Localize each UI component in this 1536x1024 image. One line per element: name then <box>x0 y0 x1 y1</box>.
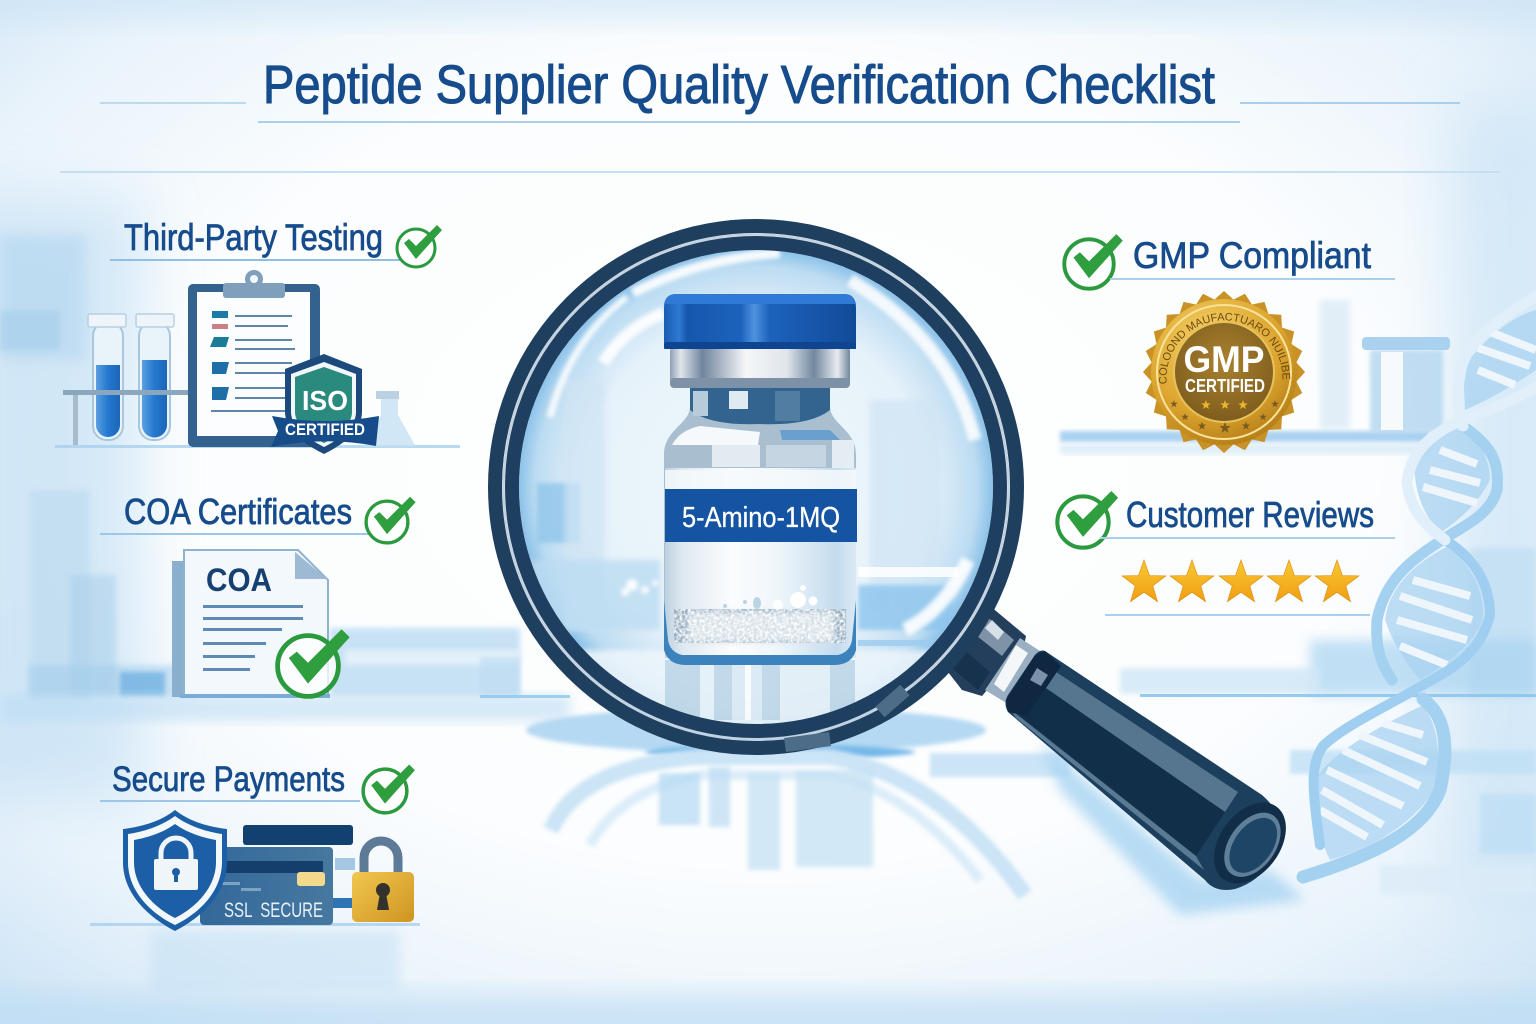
panel: COA certificates <box>100 491 416 698</box>
silver neck <box>985 638 1040 704</box>
vial label <box>665 468 856 658</box>
icon: test tubes in rack <box>63 314 196 445</box>
icon: green check <box>366 497 416 543</box>
heading underline <box>100 533 370 535</box>
badge: ISO certified <box>271 354 379 454</box>
end cap <box>1199 789 1301 897</box>
floor reflection of the magnifier <box>551 757 1025 895</box>
handle connector to rim <box>948 606 1026 696</box>
icon: large green check <box>278 629 350 696</box>
vial reflection <box>665 660 855 720</box>
title: Peptide Supplier Quality Verification Checklist <box>263 55 1215 115</box>
vial neck shading <box>690 388 830 424</box>
icon: flask <box>363 391 416 447</box>
icon: green check <box>363 765 415 813</box>
icon: credit card: SSL SECURE <box>224 899 323 922</box>
vial glass body <box>664 388 856 657</box>
blue cap <box>664 294 856 349</box>
icon: COA document: COA <box>206 562 272 598</box>
rating: five stars <box>1122 560 1359 602</box>
panel: secure payments <box>90 760 420 931</box>
badge: ISO certified: ISO <box>302 385 348 416</box>
heading: COA certificates: COA Certificates <box>124 491 352 532</box>
icon: magnifying glass handle <box>948 606 1301 897</box>
heading underline <box>110 259 400 261</box>
icon: credit card <box>200 825 360 925</box>
heading underline <box>1100 537 1395 539</box>
badge: GMP certified seal: GMP <box>1184 339 1264 380</box>
heading: GMP compliant: GMP Compliant <box>1133 235 1372 276</box>
shelf line <box>90 923 420 926</box>
badge: GMP certified seal: CERTIFIED <box>1185 376 1265 396</box>
badge: ISO certified: CERTIFIED <box>285 420 365 439</box>
heading underline <box>1110 278 1395 280</box>
grip ferrule <box>1006 651 1061 716</box>
label band with name: 5-Amino-1MQ <box>682 502 840 534</box>
rim highlight patches <box>785 690 905 745</box>
vial base <box>664 600 856 665</box>
grip <box>1005 650 1282 890</box>
lens interior <box>519 250 1000 740</box>
icon: COA document <box>172 550 330 698</box>
icon: green check <box>397 225 442 267</box>
magnifying glass rim <box>495 226 1017 748</box>
panel: GMP compliant <box>1062 234 1395 453</box>
badge: GMP certified seal: COLOOND MAUFACTUARO NUILIBE <box>1158 312 1290 384</box>
panel: third-party testing <box>55 217 460 454</box>
badge: GMP certified seal <box>1143 291 1305 453</box>
icon: green check <box>1064 234 1123 289</box>
rating underline <box>1105 614 1370 616</box>
vial <box>664 294 857 665</box>
decorative DNA helix <box>1303 296 1536 877</box>
heading underline <box>100 800 360 802</box>
icon: clipboard checklist <box>188 270 320 447</box>
heading: secure payments: Secure Payments <box>112 760 345 799</box>
heading: customer reviews: Customer Reviews <box>1126 494 1374 535</box>
heading: third-party testing: Third-Party Testing <box>124 217 383 258</box>
icon: padlock <box>352 841 414 922</box>
panel: customer reviews <box>1057 491 1395 616</box>
icon: green check <box>1057 491 1118 548</box>
shelf line <box>55 445 460 448</box>
label band with name <box>665 489 857 542</box>
vial powder <box>674 585 846 643</box>
icon: security shield <box>123 810 227 931</box>
metal crimp <box>670 346 850 388</box>
vial shoulder highlights <box>672 426 760 445</box>
